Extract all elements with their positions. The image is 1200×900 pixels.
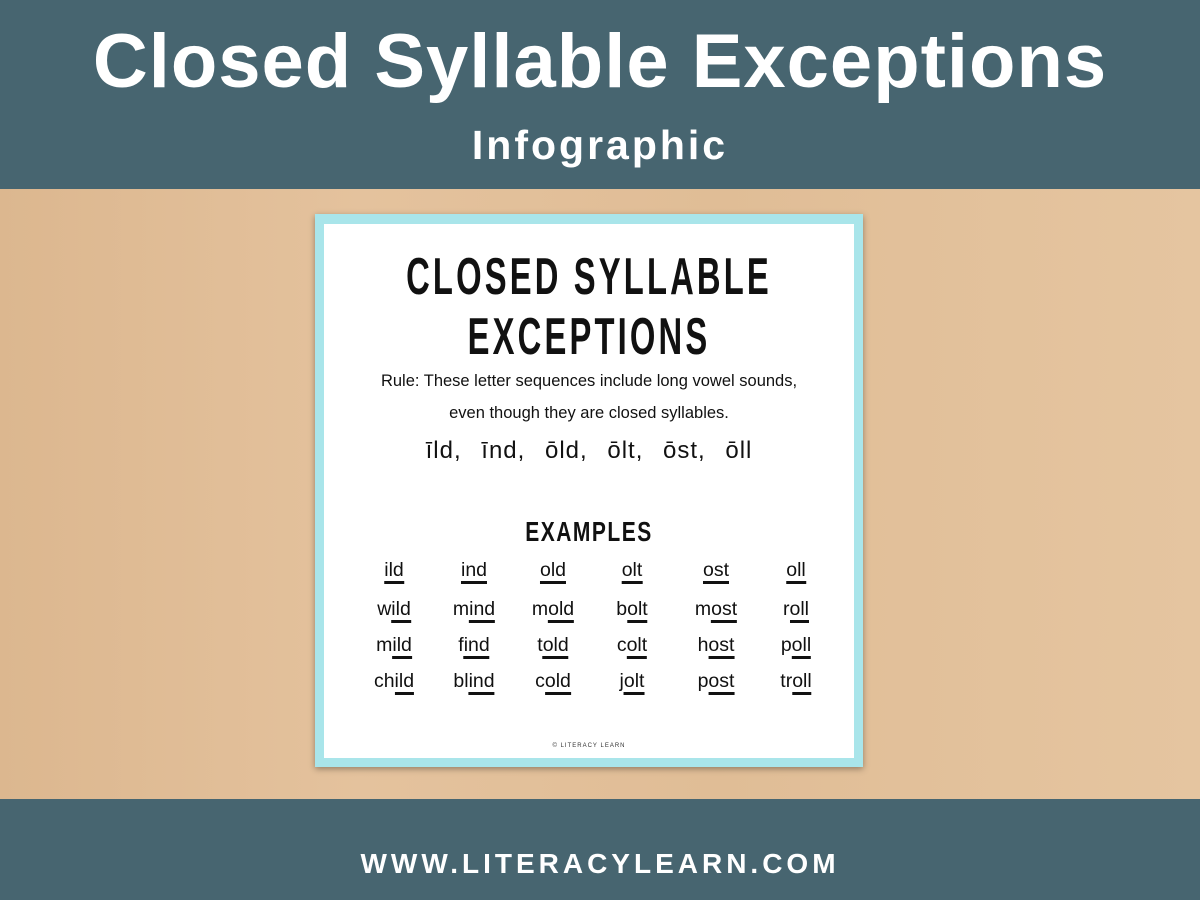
examples grid: child: [374, 670, 414, 692]
examples grid: blind: [453, 670, 495, 692]
examples grid: colt: [617, 634, 647, 656]
card title line 2: EXCEPTIONS: [468, 308, 710, 366]
examples grid: cold: [535, 670, 571, 692]
examples grid: host: [698, 634, 734, 656]
examples grid: jolt: [620, 670, 644, 692]
examples grid: ild: [384, 559, 404, 581]
title: Closed Syllable Exceptions: [93, 19, 1107, 104]
examples grid: old: [540, 559, 566, 581]
examples grid: mild: [376, 634, 412, 656]
examples grid: olt: [622, 559, 642, 581]
examples grid: troll: [780, 670, 812, 692]
header banner: [0, 0, 1200, 189]
footer url: WWW.LITERACYLEARN.COM: [360, 848, 840, 879]
subtitle: Infographic: [472, 122, 728, 168]
footer url: [0, 799, 1200, 900]
examples grid: mind: [453, 598, 495, 620]
rule text line 2: even though they are closed syllables.: [449, 404, 729, 422]
rule text: Rule: These letter sequences include long vowel sounds,: [381, 372, 797, 390]
examples grid: roll: [783, 598, 809, 620]
examples grid: wild: [377, 598, 411, 620]
logo: © LITERACY LEARN: [552, 743, 626, 749]
examples grid: ost: [703, 559, 729, 581]
examples heading: EXAMPLES: [525, 516, 653, 547]
card: worksheet: [315, 214, 863, 767]
examples grid: bolt: [616, 598, 648, 620]
examples grid: told: [537, 634, 569, 656]
wood background: [0, 189, 1200, 799]
examples grid: mold: [532, 598, 574, 620]
long vowel sequences: īld, īnd, ōld, ōlt, ōst, ōll: [426, 437, 752, 464]
card title line 1: CLOSED SYLLABLE: [406, 248, 772, 306]
examples grid: oll: [786, 559, 806, 581]
examples grid: ind: [461, 559, 487, 581]
examples grid: find: [458, 634, 490, 656]
examples grid: [374, 559, 812, 695]
examples grid: most: [695, 598, 737, 620]
examples grid: post: [698, 670, 734, 692]
examples grid: poll: [781, 634, 811, 656]
